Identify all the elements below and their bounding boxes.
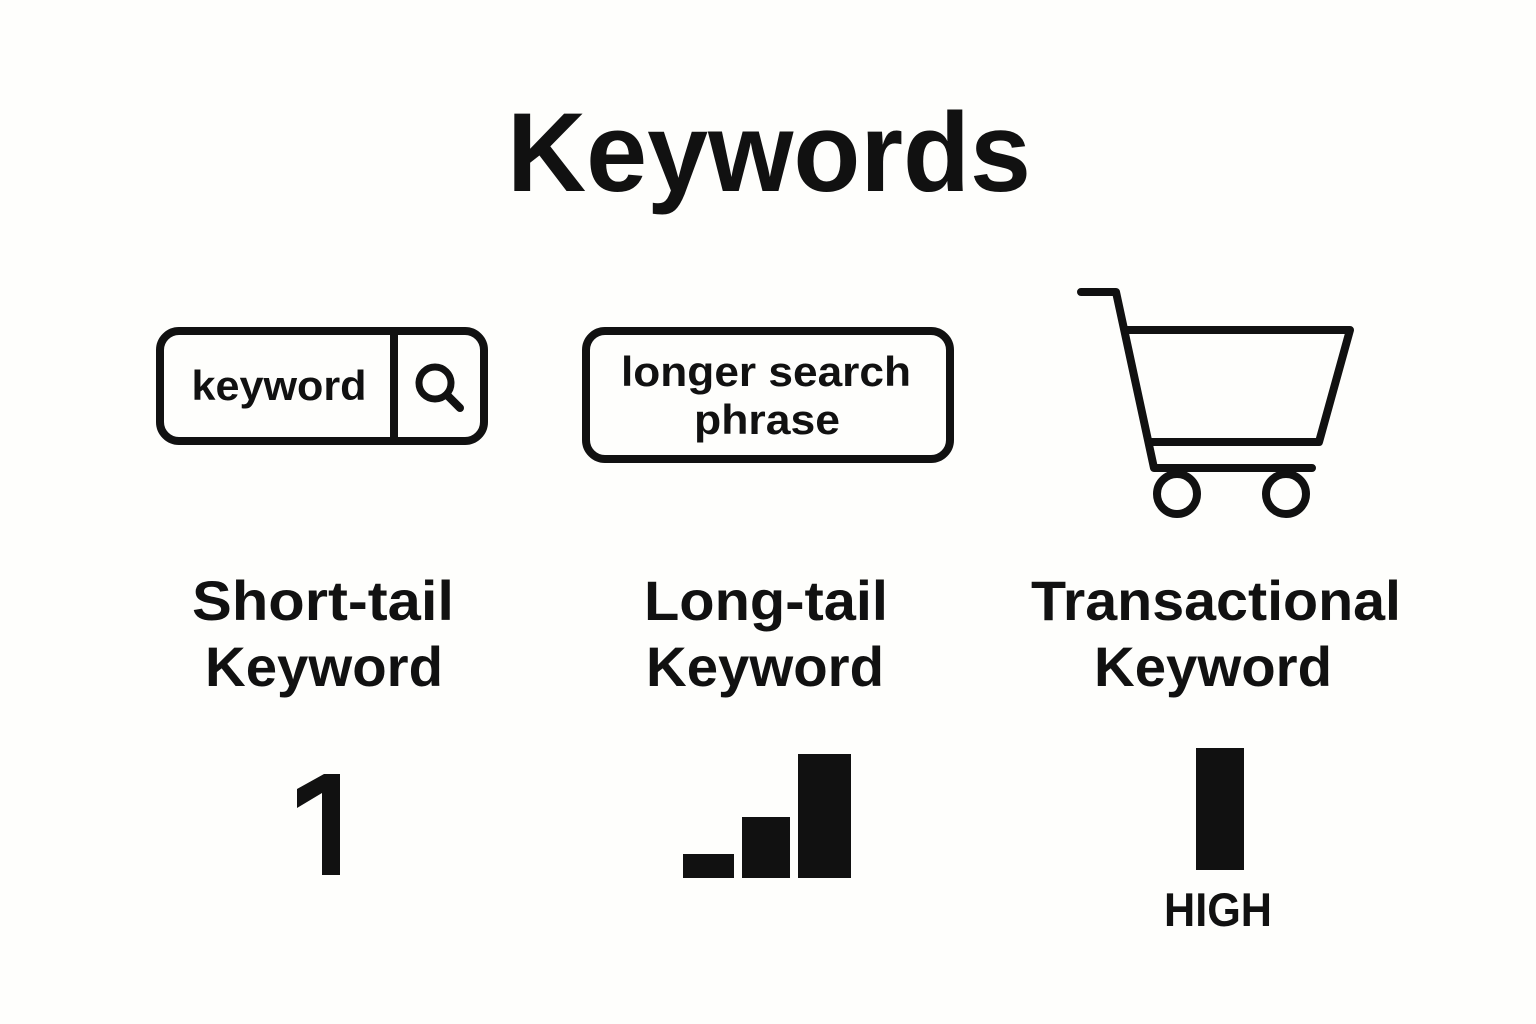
heading: transactional keyword: Transactional (1031, 569, 1401, 632)
icon: short-tail search box: keyword (192, 362, 366, 409)
heading: long-tail keyword (644, 569, 888, 698)
icon: long-tail search box (586, 331, 950, 459)
heading: short-tail keyword: Keyword (205, 635, 443, 698)
heading: transactional keyword: Keyword (1094, 635, 1332, 698)
heading: long-tail keyword: Keyword (646, 635, 884, 698)
title: Keywords (507, 90, 1031, 215)
icon: shopping cart (1081, 292, 1350, 514)
heading: long-tail keyword: Long-tail (644, 569, 888, 632)
heading: short-tail keyword (192, 569, 454, 698)
number one: 1 (288, 743, 370, 906)
icon: long-tail search box: phrase (694, 396, 840, 443)
heading: transactional keyword (1031, 569, 1401, 698)
icon: short-tail search box (160, 331, 484, 441)
icon: long-tail search box: longer search (621, 348, 911, 395)
label: high: HIGH (1164, 883, 1272, 936)
bar chart: high bar (1196, 748, 1244, 870)
heading: short-tail keyword: Short-tail (192, 569, 454, 632)
bar chart: rising bars (683, 754, 851, 878)
